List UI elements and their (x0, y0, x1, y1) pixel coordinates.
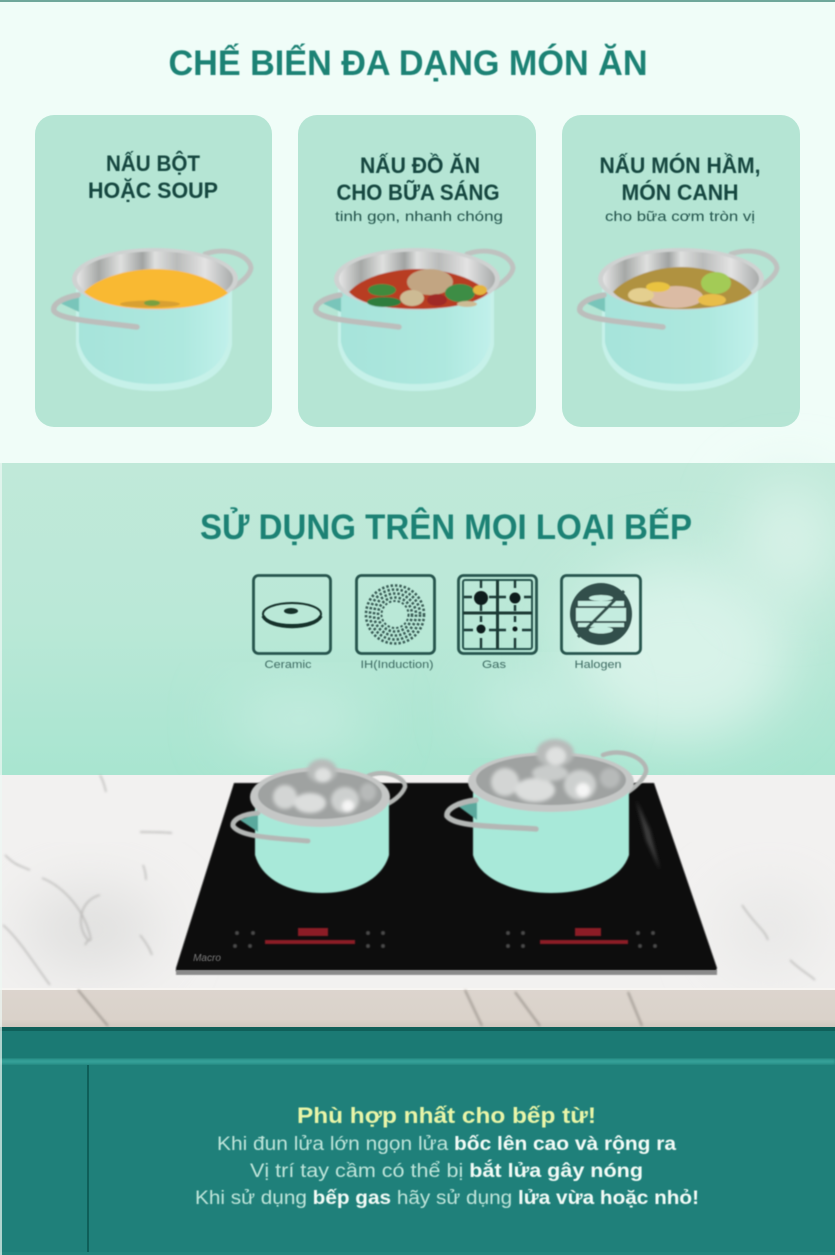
induction cooktop (176, 783, 717, 975)
card heading: nấu bột hoặc soup: NẤU BỘT (106, 151, 201, 176)
heading: chế biến đa dạng món ăn: CHẾ BIẾN ĐA DẠNG MÓN ĂN (168, 43, 648, 83)
left image border (0, 463, 2, 1255)
card heading: nấu món hầm, món canh: MÓN CANH (622, 180, 738, 205)
teal cabinet (0, 1027, 835, 1255)
icon: halogen: Halogen (574, 659, 622, 671)
panel: nấu bột hoặc soup (35, 115, 272, 427)
callout heading: Phù hợp nhất cho bếp từ! (297, 1103, 596, 1128)
marble countertop (0, 775, 835, 990)
icon: induction: IH(Induction) (360, 659, 434, 671)
panel: nấu món hầm, món canh (562, 115, 800, 427)
card heading: nấu đồ ăn cho bữa sáng: NẤU ĐỒ ĂN (360, 153, 480, 178)
callout: lưu ý sử dụng (195, 1103, 699, 1209)
control panel: right (506, 928, 657, 948)
panel: nấu đồ ăn cho bữa sáng (298, 115, 536, 427)
pot with yellow soup (54, 248, 251, 391)
card heading: nấu món hầm, món canh (600, 153, 760, 224)
reflection on glass (636, 800, 660, 870)
card heading: nấu món hầm, món canh: NẤU MÓN HẦM, (600, 153, 760, 178)
callout line 3: Khi sử dụng bếp gas hãy sử dụng lửa vừa hoặc nhỏ! (195, 1188, 699, 1209)
card heading: nấu bột hoặc soup (88, 151, 218, 203)
icon: halogen (562, 576, 640, 671)
card heading: nấu bột hoặc soup: HOẶC SOUP (88, 178, 218, 203)
icon: induction (356, 576, 434, 671)
callout line 2: Vị trí tay cầm có thể bị bắt lửa gây nóng (250, 1160, 643, 1182)
pot with breakfast food (316, 248, 513, 391)
card heading: nấu đồ ăn cho bữa sáng (335, 153, 503, 224)
pot on cooktop: small (233, 759, 405, 893)
icon: ceramic (254, 576, 330, 671)
callout line 1: Khi đun lửa lớn ngọn lửa bốc lên cao và rộng ra (217, 1134, 676, 1155)
card heading: nấu đồ ăn cho bữa sáng: tinh gọn, nhanh chóng (335, 208, 503, 224)
heading: sử dụng trên mọi loại bếp: SỬ DỤNG TRÊN MỌI LOẠI BẾP (200, 507, 692, 547)
card heading: nấu món hầm, món canh: cho bữa cơm tròn vị (605, 208, 755, 224)
cooktop brand: Macro (193, 953, 221, 964)
countertop front edge (0, 988, 835, 1027)
icon: ceramic: Ceramic (264, 659, 312, 671)
pot with stew (580, 248, 777, 391)
card heading: nấu đồ ăn cho bữa sáng: CHO BỮA SÁNG (336, 180, 500, 205)
icon: gas (458, 576, 536, 671)
control panel: left (233, 928, 385, 948)
section background: sử dụng trên mọi loại bếp (0, 463, 835, 776)
top edge strip (0, 0, 835, 2)
icon: gas: Gas (482, 659, 507, 671)
page background (0, 0, 835, 463)
pot on cooktop: large (447, 739, 646, 893)
